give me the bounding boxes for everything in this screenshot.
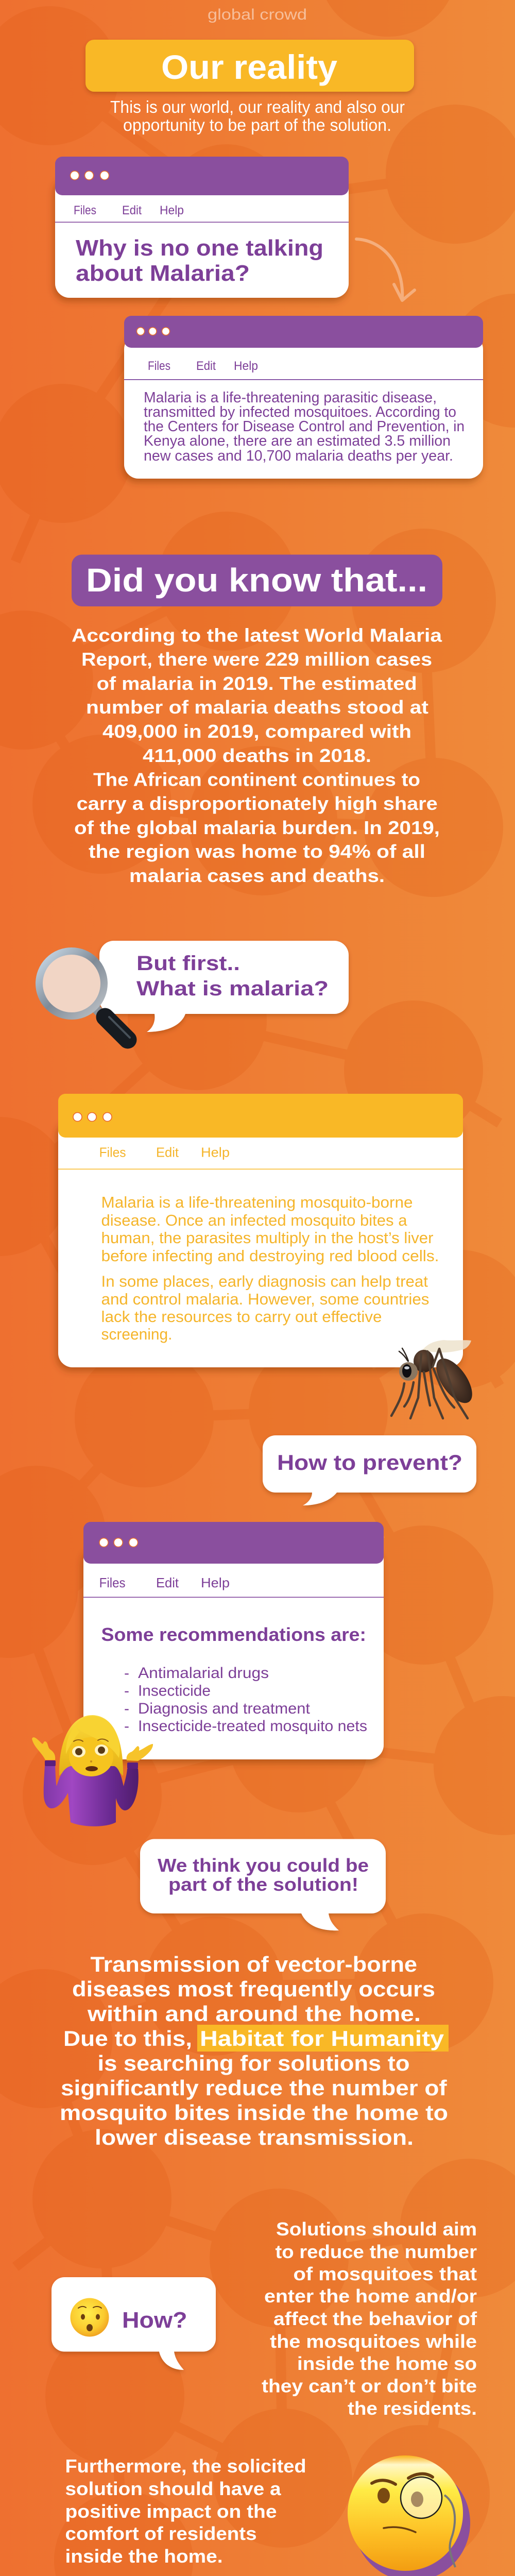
- window: recommendations: Insecticide-treated mosquito nets: [138, 1718, 367, 1735]
- text block: transmission and Habitat for Humanity: within and around the home.: [87, 2002, 421, 2026]
- text block: malaria statistics: number of malaria deaths stood at: [86, 697, 428, 718]
- window: recommendations: Insecticide: [138, 1683, 211, 1699]
- window: Why is no one talking about Malaria: [55, 157, 349, 298]
- text block: transmission and Habitat for Humanity: Habitat for Humanity: [200, 2026, 444, 2050]
- text block: malaria statistics: of the global malaria burden. In 2019,: [74, 817, 440, 838]
- window: malaria parasitic disease: the Centers for Disease Control and Prevention, in: [144, 418, 465, 435]
- window: Why is no one talking about Malaria: Help: [160, 204, 184, 217]
- bubble: How: [52, 2277, 216, 2370]
- bubble: But first, what is malaria: What is malaria?: [136, 977, 329, 1000]
- text block: transmission and Habitat for Humanity: significantly reduce the number of: [61, 2076, 448, 2100]
- window: recommendations: -: [124, 1700, 129, 1717]
- text block: solutions should aim: enter the home and/or: [264, 2285, 477, 2307]
- window: what is malaria explanation: screening.: [101, 1325, 172, 1343]
- window: recommendations: Help: [201, 1575, 230, 1590]
- window: what is malaria explanation: Files: [99, 1145, 126, 1160]
- window: recommendations: Antimalarial drugs: [138, 1665, 269, 1682]
- title panel: Our reality: [85, 40, 414, 92]
- window: what is malaria explanation: In some places, early diagnosis can help treat: [101, 1273, 428, 1290]
- text block: furthermore: comfort of residents: [65, 2523, 256, 2544]
- text block: transmission and Habitat for Humanity: Transmission of vector-borne: [91, 1952, 417, 1976]
- window: malaria parasitic disease: transmitted by infected mosquitoes. According to: [144, 404, 456, 420]
- text block: furthermore: [65, 2455, 306, 2567]
- bubble: How to prevent: How to prevent?: [277, 1450, 462, 1475]
- window: recommendations: Some recommendations are:: [101, 1624, 366, 1645]
- intro text: opportunity to be part of the solution.: [123, 115, 391, 134]
- text block: solutions should aim: Solutions should aim: [276, 2218, 477, 2240]
- text block: transmission and Habitat for Humanity: is searching for solutions to: [98, 2051, 409, 2075]
- text block: transmission and Habitat for Humanity: [60, 1952, 449, 2149]
- text block: solutions should aim: to reduce the number: [275, 2241, 477, 2262]
- heading panel: Did you know that: [72, 554, 442, 606]
- bubble: We think you could be part of the solution: We think you could be: [158, 1855, 369, 1876]
- window: Why is no one talking about Malaria: Edit: [122, 204, 142, 217]
- window: malaria parasitic disease: Malaria is a life-threatening parasitic disease,: [144, 389, 437, 406]
- bubble: How: How?: [122, 2308, 187, 2333]
- window: malaria parasitic disease: [124, 316, 483, 479]
- window: recommendations: Diagnosis and treatment: [138, 1700, 311, 1717]
- text block: malaria statistics: The African continent continues to: [93, 769, 420, 790]
- heading panel: Did you know that: Did you know that...: [86, 562, 427, 599]
- window: malaria parasitic disease: Files: [148, 359, 170, 373]
- text block: furthermore: Furthermore, the solicited: [65, 2455, 306, 2477]
- window: what is malaria explanation: disease. Once an infected mosquito bites a: [101, 1211, 407, 1229]
- window: Why is no one talking about Malaria: about Malaria?: [76, 261, 250, 286]
- window: what is malaria explanation: human, the parasites multiply in the host’s liver: [101, 1229, 433, 1247]
- window: malaria parasitic disease: Help: [234, 359, 258, 373]
- text block: solutions should aim: they can’t or don’t bite: [262, 2375, 477, 2397]
- text block: transmission and Habitat for Humanity: diseases most frequently occurs: [72, 1977, 435, 2001]
- text block: malaria statistics: malaria cases and deaths.: [129, 865, 385, 886]
- text block: solutions should aim: inside the home so: [297, 2353, 477, 2374]
- text block: malaria statistics: 409,000 in 2019, compared with: [102, 721, 411, 742]
- bubble: We think you could be part of the solution: [140, 1839, 386, 1930]
- arrow: curved down: [356, 239, 415, 300]
- text block: transmission and Habitat for Humanity: Due to this,: [63, 2026, 192, 2050]
- window: recommendations: [83, 1522, 384, 1759]
- text block: transmission and Habitat for Humanity: lower disease transmission.: [95, 2125, 414, 2149]
- text block: solutions should aim: the mosquitoes while: [270, 2331, 477, 2352]
- title text: Our reality: [161, 48, 337, 86]
- window: Why is no one talking about Malaria: Why is no one talking: [76, 235, 323, 261]
- intro text: This is our world, our reality and also our: [110, 97, 405, 116]
- text block: malaria statistics: 411,000 deaths in 2018.: [143, 745, 371, 766]
- bubble: We think you could be part of the solution: part of the solution!: [168, 1874, 358, 1895]
- text block: furthermore: solution should have a: [65, 2478, 282, 2499]
- window: what is malaria explanation: Malaria is a life-threatening mosquito-borne: [101, 1193, 413, 1211]
- text block: solutions should aim: [262, 2218, 477, 2419]
- window: what is malaria explanation: Help: [201, 1145, 230, 1160]
- text block: transmission and Habitat for Humanity: mosquito bites inside the home to: [60, 2100, 448, 2125]
- text block: malaria statistics: According to the latest World Malaria: [72, 624, 442, 646]
- window: malaria parasitic disease: Edit: [196, 359, 216, 373]
- text block: malaria statistics: Report, there were 229 million cases: [81, 649, 432, 670]
- window: recommendations: -: [124, 1665, 129, 1682]
- icon: mosquito: [391, 1340, 479, 1418]
- logo: global crowd: global crowd: [208, 6, 307, 23]
- window: recommendations: -: [124, 1683, 129, 1699]
- window: recommendations: Files: [99, 1575, 126, 1590]
- intro text: [110, 97, 405, 134]
- bubble: But first, what is malaria: [99, 941, 349, 1032]
- text block: malaria statistics: [72, 624, 442, 886]
- text block: malaria statistics: carry a disproportionately high share: [77, 793, 438, 814]
- window: Why is no one talking about Malaria: Files: [74, 204, 96, 217]
- icon: face with monocle: [348, 2455, 470, 2576]
- window: what is malaria explanation: lack the resources to carry out effective: [101, 1308, 382, 1326]
- text block: solutions should aim: the residents.: [348, 2398, 477, 2419]
- text block: furthermore: positive impact on the: [65, 2501, 277, 2522]
- window: what is malaria explanation: [58, 1094, 463, 1367]
- text block: solutions should aim: of mosquitoes that: [294, 2263, 477, 2284]
- icon: shrugging woman: [32, 1715, 153, 1826]
- text block: malaria statistics: the region was home to 94% of all: [89, 841, 425, 862]
- window: malaria parasitic disease: new cases and 10,700 malaria deaths per year.: [144, 448, 453, 464]
- window: what is malaria explanation: Edit: [156, 1145, 179, 1160]
- text block: malaria statistics: of malaria in 2019. The estimated: [97, 673, 417, 694]
- icon: magnifying glass: [39, 951, 130, 1040]
- window: what is malaria explanation: before infecting and destroying red blood cells.: [101, 1247, 439, 1265]
- text block: furthermore: inside the home.: [65, 2546, 222, 2567]
- text block: solutions should aim: affect the behavior of: [273, 2308, 477, 2329]
- window: what is malaria explanation: and control malaria. However, some countries: [101, 1290, 430, 1308]
- bubble: How to prevent: [263, 1435, 476, 1505]
- window: recommendations: -: [124, 1718, 129, 1735]
- window: malaria parasitic disease: Kenya alone, there are an estimated 3.5 million: [144, 433, 451, 449]
- window: recommendations: Edit: [156, 1575, 179, 1590]
- bubble: But first, what is malaria: But first..: [136, 952, 240, 975]
- icon: hushed face: [70, 2298, 109, 2337]
